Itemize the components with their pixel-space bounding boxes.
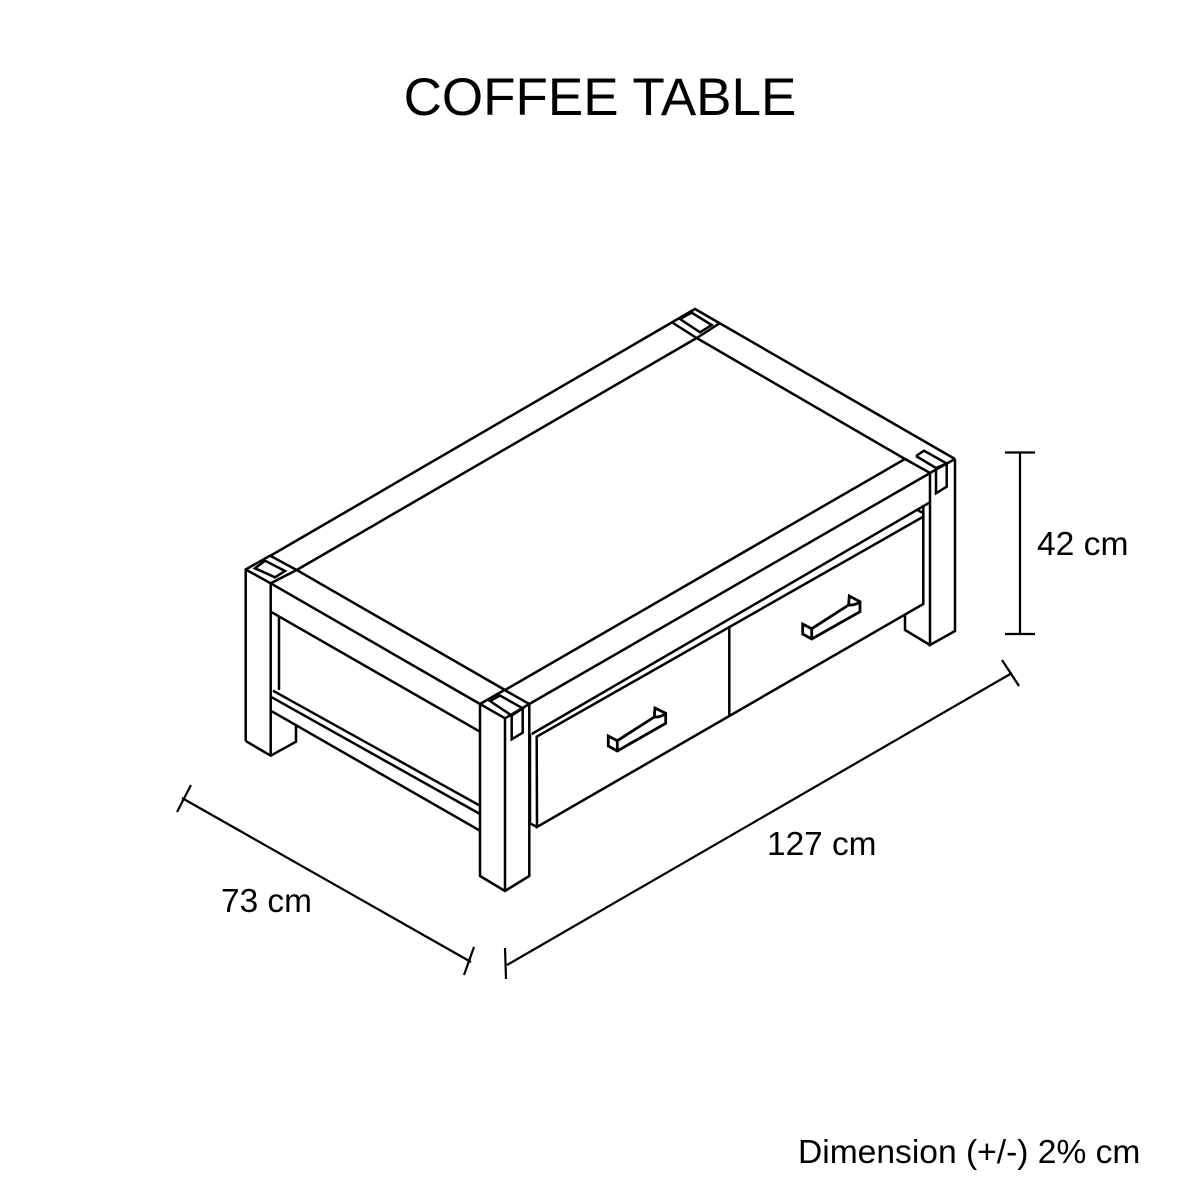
title: COFFEE TABLE bbox=[404, 68, 796, 127]
tolerance note: Dimension (+/-) 2% cm bbox=[798, 1134, 1140, 1171]
dimension: length bbox=[505, 660, 1019, 979]
end apron and lower shelf bbox=[271, 583, 480, 831]
table top bbox=[270, 309, 955, 690]
coffee table line drawing bbox=[246, 309, 955, 891]
back corner joint bbox=[673, 313, 720, 338]
handle: right drawer bbox=[803, 596, 860, 639]
left back leg bbox=[246, 556, 297, 756]
dimension: depth bbox=[177, 785, 474, 975]
right corner leg bbox=[905, 451, 955, 645]
dimension: height bbox=[1005, 452, 1128, 634]
handle: left drawer bbox=[608, 708, 666, 751]
drawers bbox=[530, 507, 923, 827]
front apron bbox=[529, 474, 929, 734]
dimension: length: 127 cm bbox=[767, 826, 876, 863]
dimension: depth: 73 cm bbox=[221, 883, 312, 920]
front corner leg bbox=[480, 690, 529, 891]
dimension: height: 42 cm bbox=[1037, 526, 1128, 563]
